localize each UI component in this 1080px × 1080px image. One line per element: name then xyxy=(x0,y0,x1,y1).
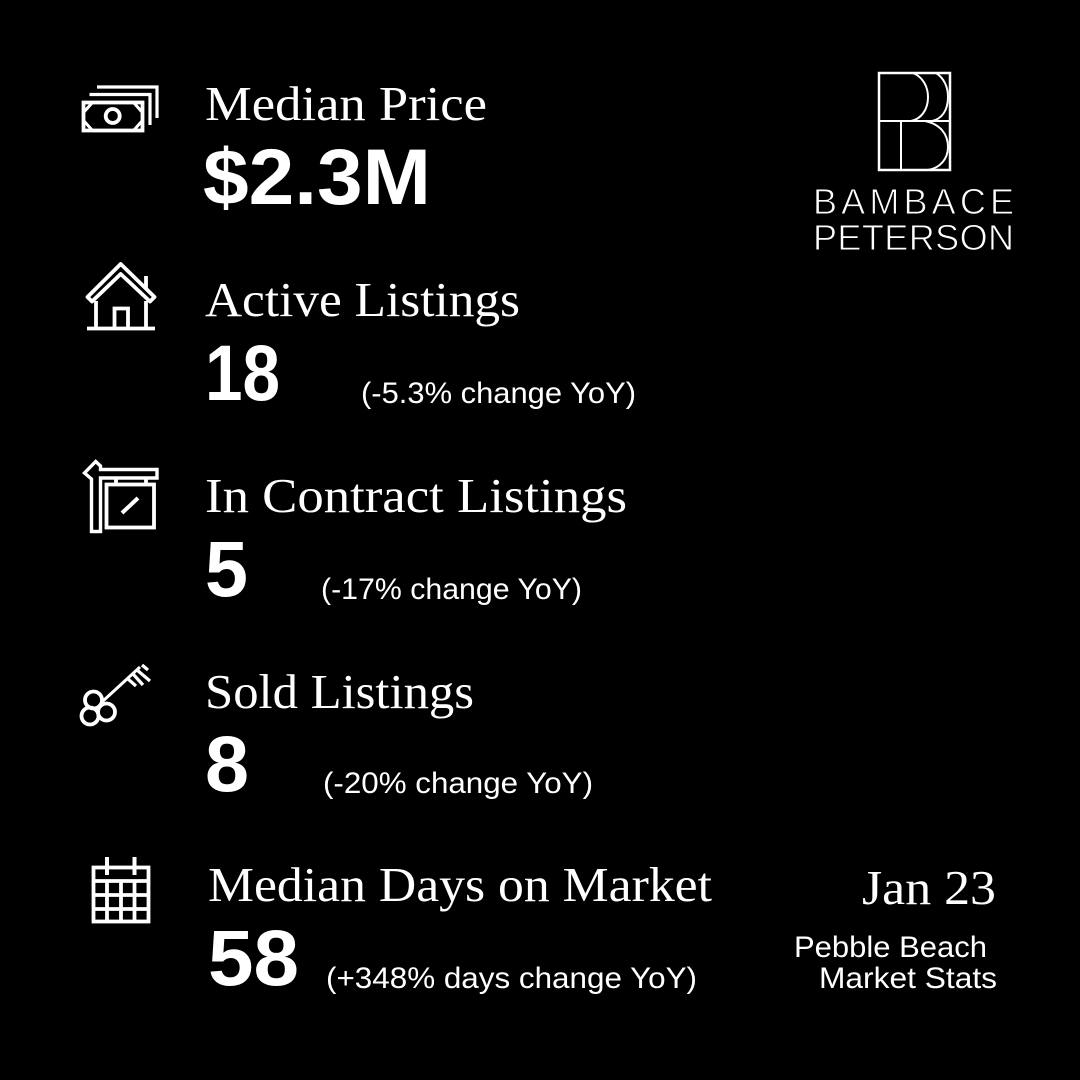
heading: median days on market: Median Days on Market xyxy=(208,857,712,912)
number: days on market: 58 xyxy=(208,913,299,1002)
location label: Market Stats xyxy=(819,962,997,995)
logo mark xyxy=(879,73,950,170)
change: days on market: (+348% days change YoY) xyxy=(326,962,697,995)
change: sold: (-20% change YoY) xyxy=(323,767,593,800)
change: active listings: (-5.3% change YoY) xyxy=(361,377,636,410)
logo: Bambace Peterson xyxy=(813,73,1014,258)
heading: active listings: Active Listings xyxy=(205,272,520,327)
icon: calendar xyxy=(93,857,149,922)
number: in contract: 5 xyxy=(205,524,248,613)
change: in contract: (-17% change YoY) xyxy=(321,573,582,606)
logo wordmark: Bambace: BAMBACE xyxy=(813,181,1014,222)
logo wordmark: Peterson: PETERSON xyxy=(813,217,1014,258)
date: Jan 23 xyxy=(862,860,996,915)
heading: in contract listings: In Contract Listings xyxy=(205,468,627,523)
heading: sold listings: Sold Listings xyxy=(205,664,474,719)
icon: key xyxy=(82,665,150,724)
location label xyxy=(794,931,997,995)
icon: for sale sign xyxy=(84,462,157,532)
number: sold: 8 xyxy=(205,719,249,808)
heading: median price: Median Price xyxy=(205,76,487,131)
icon: money stack xyxy=(84,87,157,130)
number: active listings: 18 xyxy=(205,328,280,417)
number: median price: $2.3M xyxy=(203,132,431,221)
location label: Pebble Beach xyxy=(794,931,987,964)
icon: house xyxy=(87,264,155,328)
